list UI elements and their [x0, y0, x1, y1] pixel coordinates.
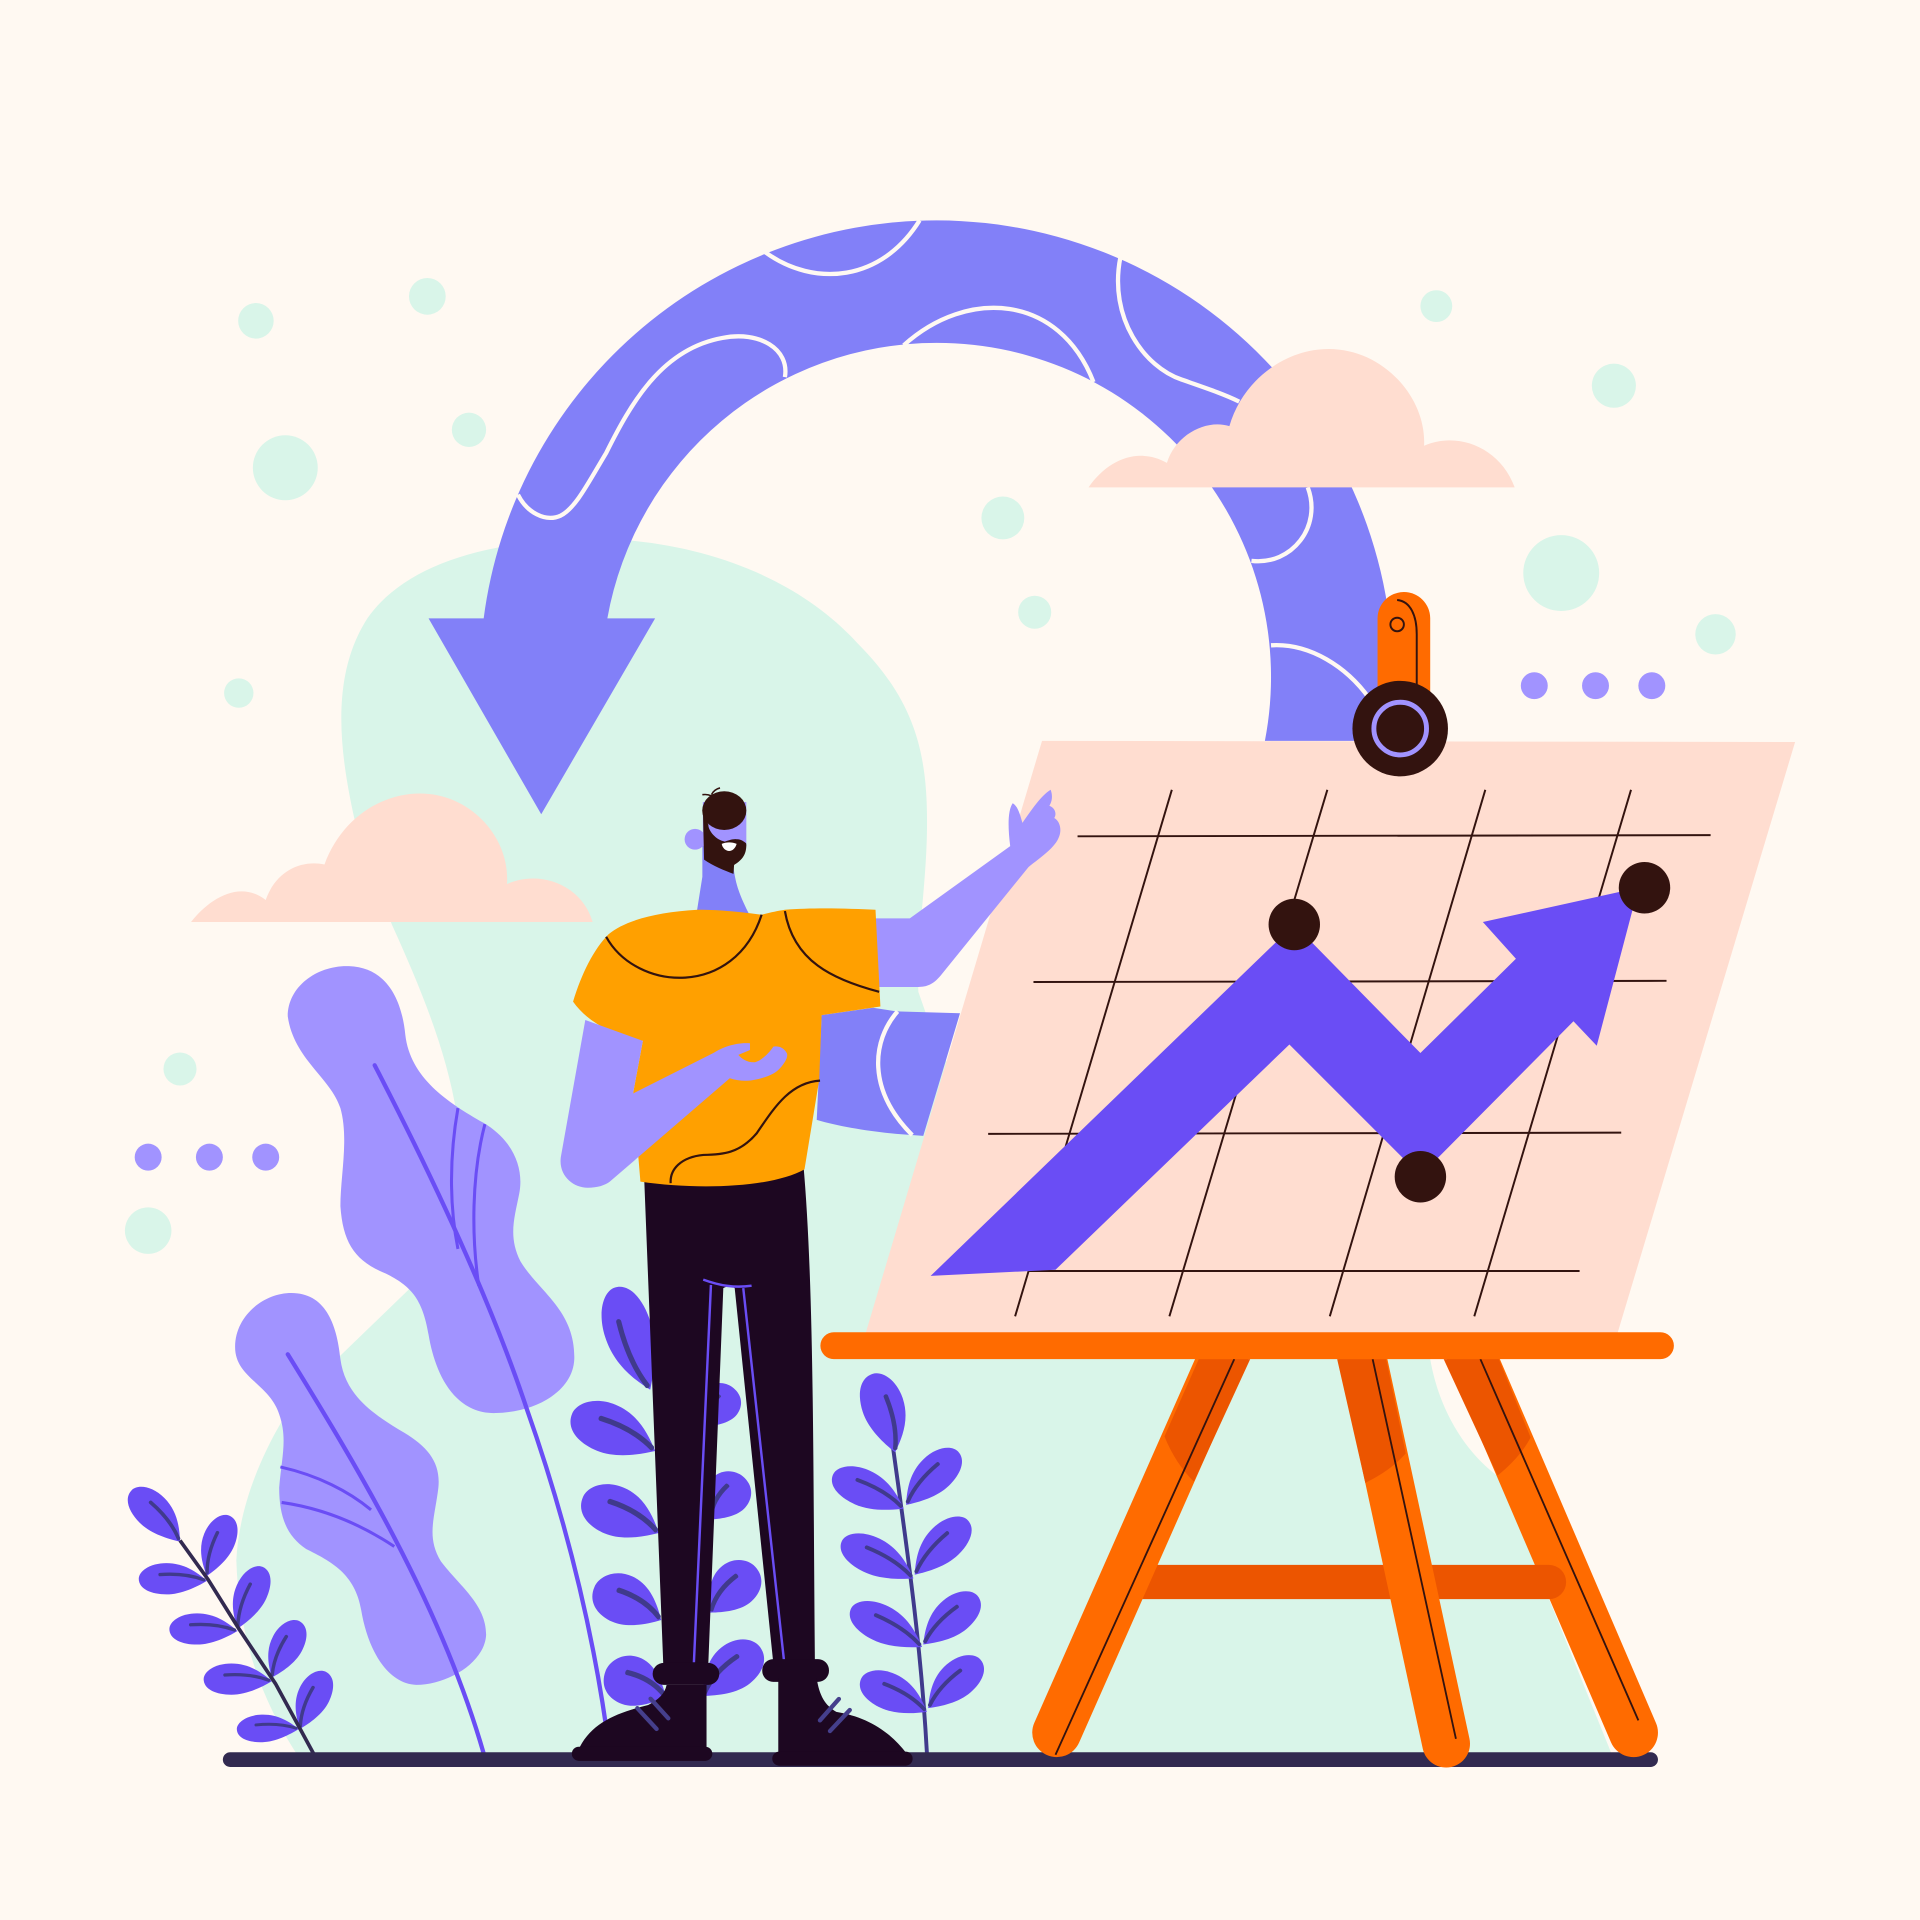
easel clip [1352, 592, 1448, 776]
raised arm [876, 790, 1060, 987]
mint background blob [236, 539, 1611, 1753]
shoe laces [637, 1699, 850, 1731]
floating mint and purple dots [125, 278, 1736, 1254]
orange shirt [573, 908, 880, 1186]
zigzag growth arrow [931, 888, 1638, 1276]
man presenting [561, 788, 1060, 1766]
easel top bar [820, 1332, 1674, 1359]
left boot [572, 1663, 719, 1761]
plant: behind man [563, 1280, 774, 1717]
plant: right of man [826, 1367, 992, 1753]
cloud: left [191, 793, 593, 922]
pants seams [694, 1280, 784, 1662]
ear [685, 829, 705, 850]
chart grid [988, 790, 1711, 1316]
large leaf: lower [235, 1293, 486, 1753]
pants [644, 1163, 815, 1665]
lower arm and open hand [561, 1020, 787, 1188]
easel legs [1056, 1353, 1638, 1755]
curved cycle arrow [429, 220, 1393, 814]
chart data points [1269, 862, 1670, 1202]
chart board [864, 741, 1795, 1337]
arrow segment behind man [817, 1008, 960, 1136]
shirt lines [606, 911, 879, 1183]
hair and beard [702, 788, 746, 874]
small plant: left [119, 1478, 340, 1753]
smile [722, 842, 737, 851]
right boot [762, 1659, 913, 1766]
cloud: upper right [1089, 349, 1515, 487]
ground line [223, 1752, 1658, 1767]
neck [697, 845, 749, 915]
large leaf: upper [288, 966, 610, 1753]
face [703, 802, 746, 846]
